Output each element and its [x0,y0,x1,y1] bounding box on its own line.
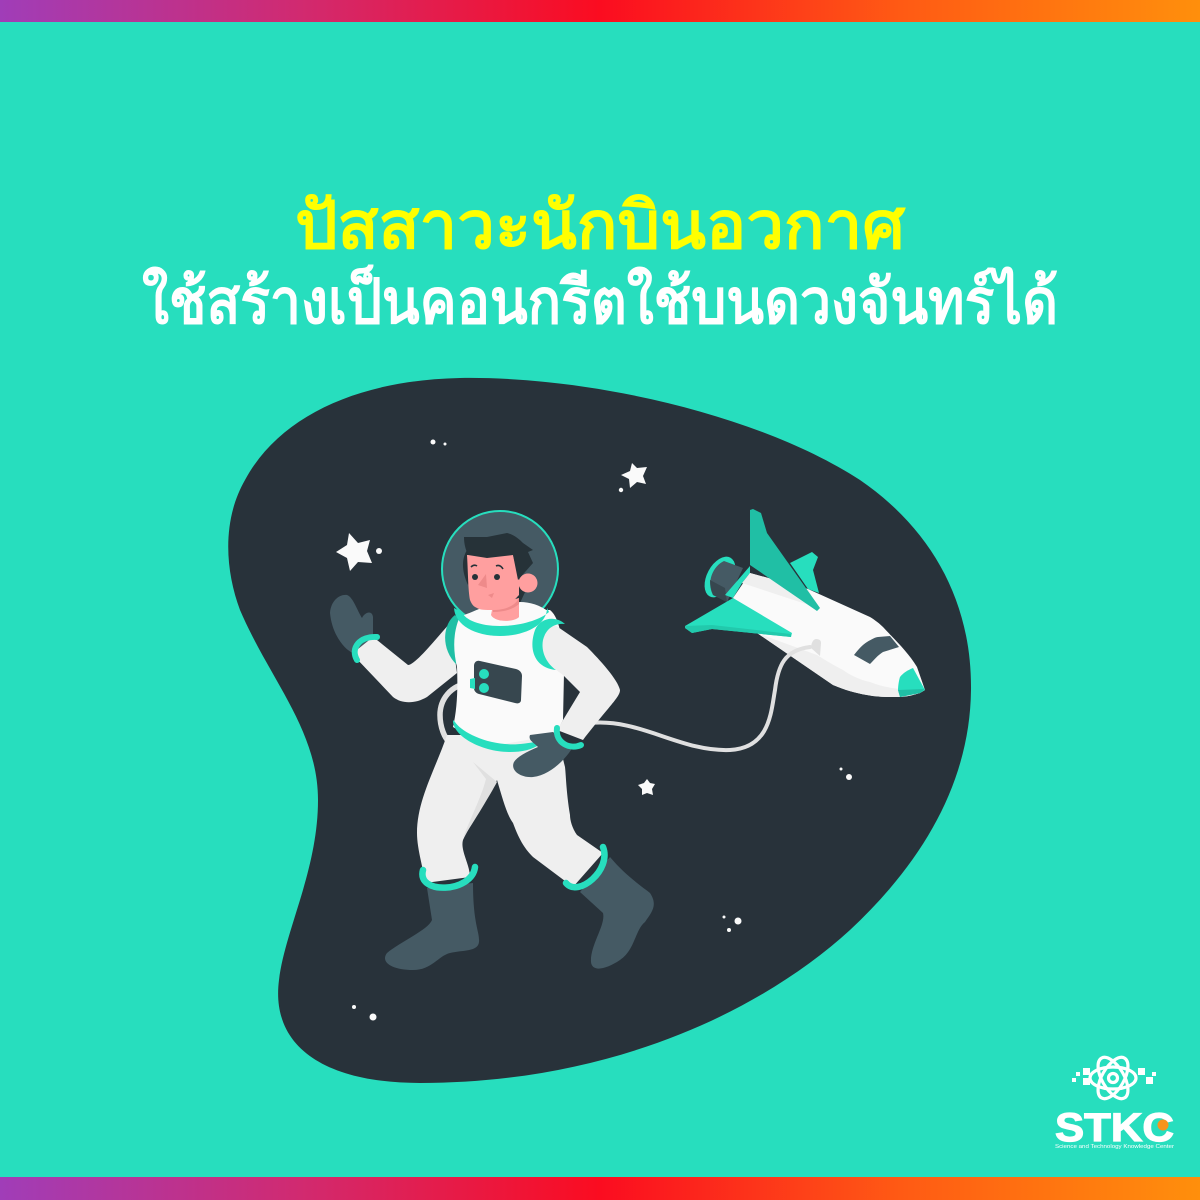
cable port [811,639,821,656]
leg shadow [463,762,497,838]
top gradient bar [0,0,1200,22]
left mitt [330,595,373,653]
title line 2: ใช้สร้างเป็นคอนกรีตใช้บนดวงจันทร์ได้ [142,264,1058,337]
boots [385,883,479,970]
torso [453,610,564,747]
left wrist cuff [355,637,377,660]
helmet [442,511,558,627]
mouth [488,593,494,598]
tail fin [750,509,820,611]
chest control panel [474,661,522,703]
eyes and brows [472,574,478,580]
boot cuffs [422,867,475,888]
dark space blob [228,378,971,1083]
engine rim [698,551,742,603]
right wrist cuff [557,728,581,747]
logo pixels [1072,1068,1156,1085]
logo orange dot [1158,1120,1168,1130]
title [142,188,1058,337]
logo tagline: Science and Technology Knowledge Center [1055,1144,1174,1150]
tether cable [440,647,810,750]
back hair [463,550,526,603]
left shoulder ring [445,615,460,665]
body shade [742,573,818,608]
bottom gradient bar [0,1177,1200,1200]
right arm [542,625,620,740]
legs [417,735,603,887]
hair [464,533,533,580]
logo wordmark: STKC [1055,1106,1174,1150]
engine collar [725,566,750,598]
logo [1055,1053,1174,1150]
atom icon [1090,1053,1136,1103]
nose cone [898,668,925,697]
rocket body [733,573,925,697]
far wing [790,552,819,593]
engine nozzle [710,561,743,602]
astronaut [330,511,654,970]
ear [518,574,538,592]
face [467,555,519,610]
right shoulder ring [532,619,565,670]
collar white [461,602,549,632]
body underside [757,633,920,697]
rocket [685,509,925,697]
right mitt [513,732,573,777]
collar ring [454,608,549,636]
stars and dots [336,440,852,1020]
near wing [685,598,792,637]
nose [478,574,487,588]
left arm [355,623,457,702]
cockpit window [854,636,899,664]
neck [491,598,519,621]
waist ring [453,720,540,752]
title line 1: ปัสสาวะนักบินอวกาศ [295,188,906,262]
